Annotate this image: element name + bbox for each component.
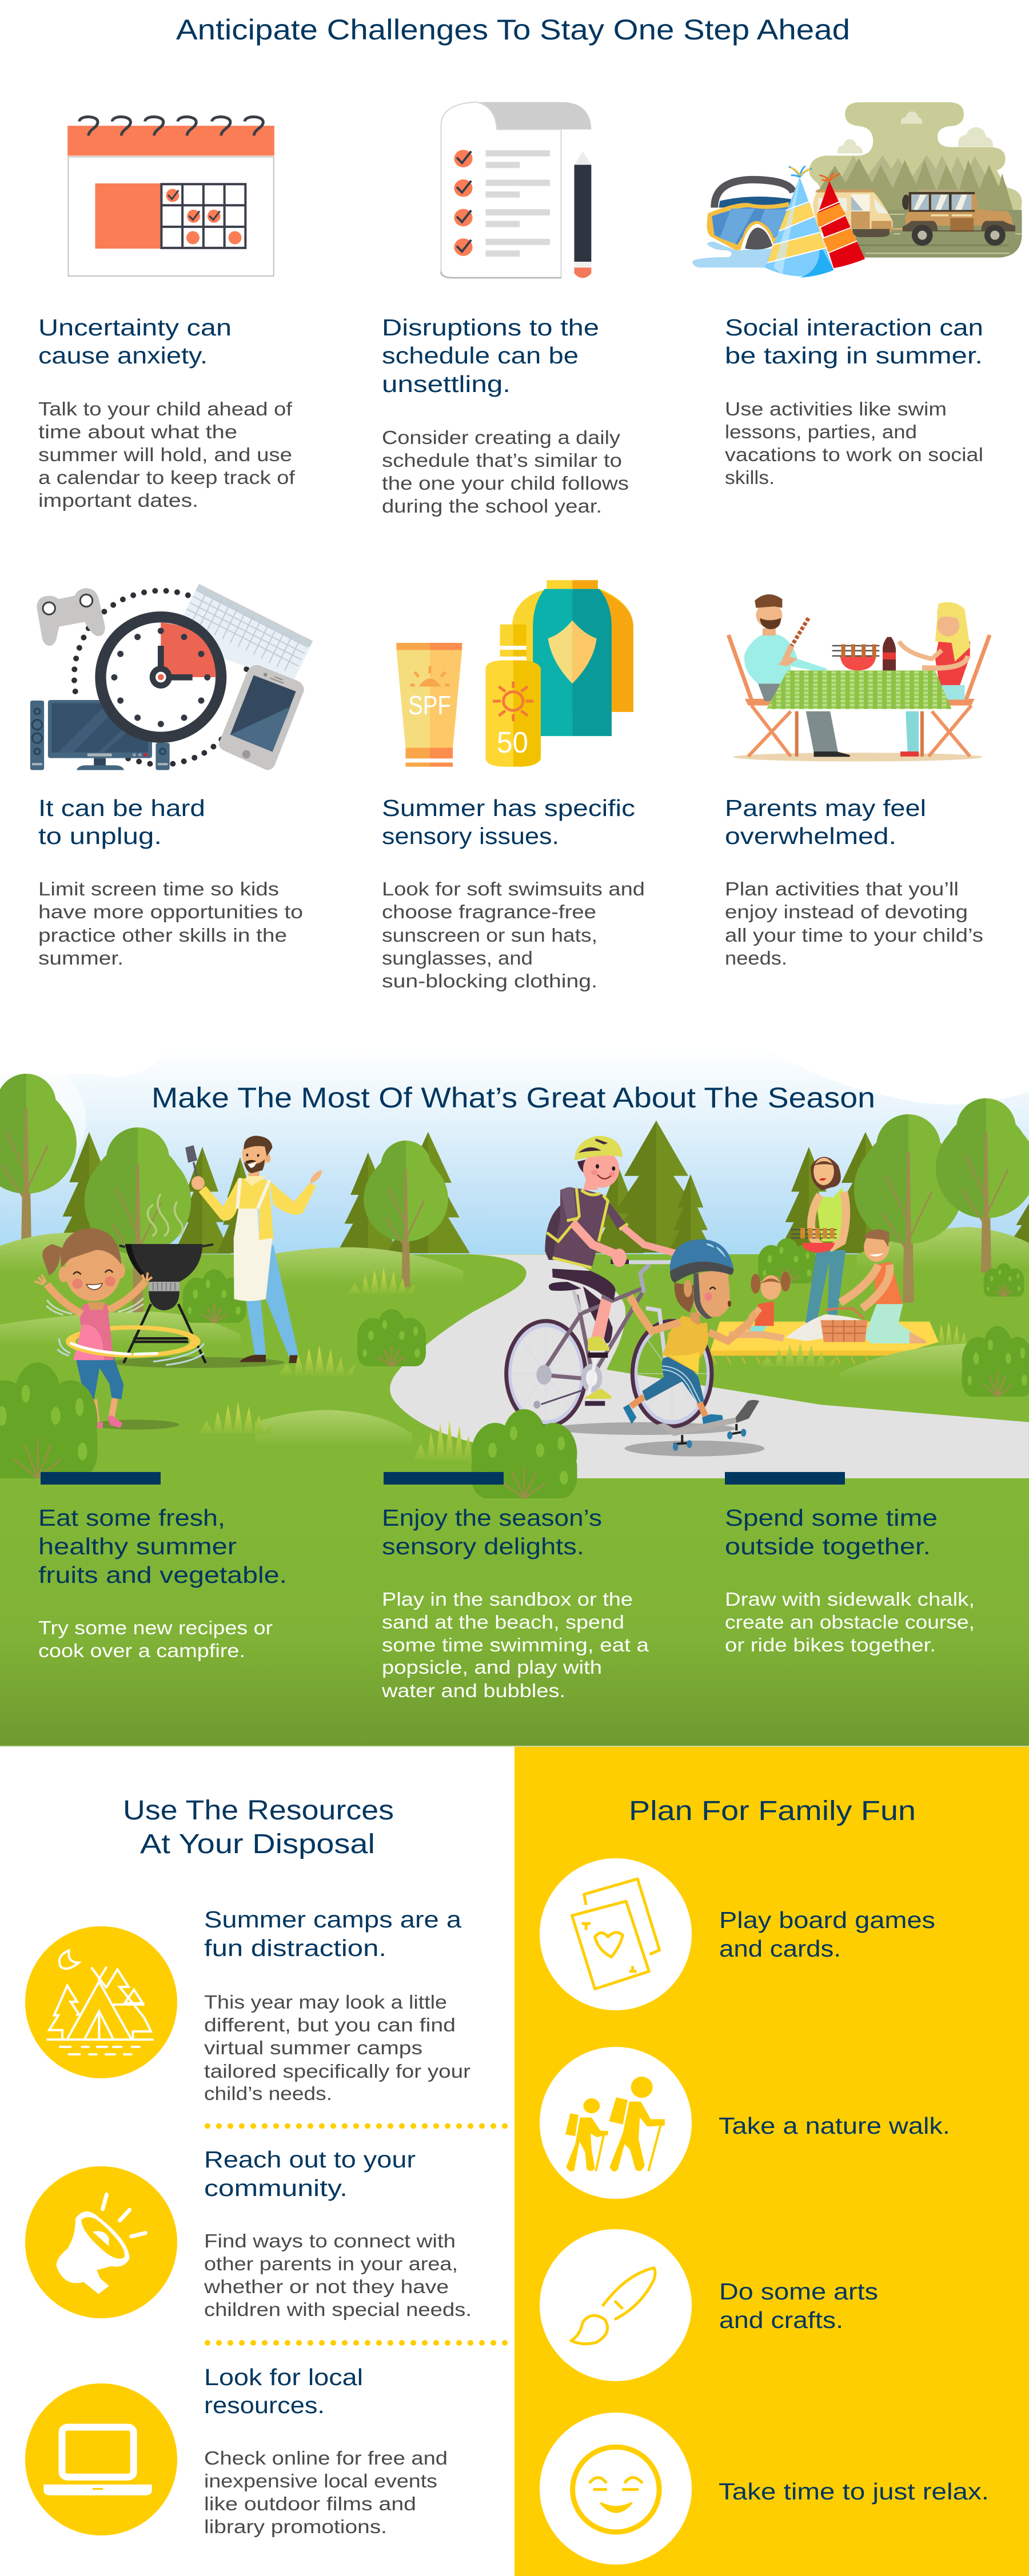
icon: sunscreen and swimsuit: [396, 580, 633, 767]
icon: laptop: [25, 2383, 177, 2535]
ground: [0, 1254, 1029, 1480]
heading: Disruptions to the: [382, 314, 599, 341]
icon: hikers: [540, 2047, 692, 2199]
body text: Talk to your child ahead of: [38, 398, 293, 419]
body text: whether or not they have: [204, 2276, 449, 2297]
body text: during the school year.: [382, 495, 602, 517]
heading: Social interaction can: [725, 314, 983, 341]
panel: parents overwhelmed: [725, 594, 990, 969]
body text: lessons, parties, and: [725, 421, 917, 442]
road: [390, 1254, 1029, 1479]
body text: the one your child follows: [382, 473, 629, 494]
heading: Eat some fresh,: [38, 1505, 225, 1531]
icon: megaphone: [25, 2166, 177, 2318]
body text: choose fragrance-free: [382, 901, 596, 922]
body text: [38, 398, 296, 511]
heading: unsettling.: [382, 371, 510, 397]
body text: time about what the: [38, 421, 237, 442]
item heading: [204, 2364, 363, 2418]
cyclist on bicycle: [506, 1136, 712, 1426]
title: Anticipate Challenges To Stay One Step Ahead: [176, 14, 850, 46]
heading: [382, 314, 599, 397]
body text: all your time to your child’s: [725, 925, 983, 946]
panel: outside together: [725, 1472, 975, 1655]
body text: practice other skills in the: [38, 925, 287, 946]
item heading: Look for local: [204, 2364, 363, 2390]
body text: Check online for free and: [204, 2447, 448, 2469]
icon: clock and screens: [30, 584, 313, 770]
icon: smiling face: [540, 2413, 692, 2565]
item heading: fun distraction.: [204, 1935, 386, 1961]
heading: sensory delights.: [382, 1533, 584, 1559]
body text: summer.: [38, 947, 123, 969]
heading: Uncertainty can: [38, 314, 232, 341]
icon: checklist and pencil: [441, 102, 591, 278]
accent bar: [384, 1472, 504, 1485]
body text: have more opportunities to: [38, 901, 303, 922]
body text: [204, 2447, 448, 2537]
heading: Spend some time: [725, 1505, 938, 1531]
heading: [382, 1505, 602, 1559]
body text: [725, 1589, 975, 1655]
heading: [725, 314, 983, 369]
grass tuft: [760, 1341, 836, 1367]
panel: sensory delights: [381, 1472, 649, 1701]
panel: fresh fruits and vegetables: [38, 1472, 287, 1661]
body text: popsicle, and play with: [382, 1657, 602, 1678]
chef: [185, 1136, 322, 1363]
body text: Play in the sandbox or the: [382, 1589, 633, 1610]
body text: sand at the beach, spend: [382, 1611, 624, 1633]
item heading: Reach out to your: [204, 2146, 416, 2173]
heading: cause anxiety.: [38, 342, 208, 369]
heading: to unplug.: [38, 823, 162, 849]
heading: Parents may feel: [725, 795, 926, 821]
icon: sunscreen and swimsuit: 50: [497, 726, 528, 759]
body text: [382, 878, 645, 991]
body text: Plan activities that you’ll: [725, 878, 959, 899]
body text: like outdoor films and: [204, 2493, 416, 2514]
body text: [204, 1991, 470, 2104]
park scene: [0, 1046, 1029, 1480]
body text: Draw with sidewalk chalk,: [725, 1589, 975, 1610]
item heading: [204, 2146, 416, 2201]
body text: Find ways to connect with: [204, 2230, 456, 2251]
body text: [38, 1617, 273, 1661]
body text: skills.: [725, 467, 775, 488]
item text: Do some arts: [719, 2278, 878, 2305]
panel: resources: [25, 1795, 508, 2537]
item heading: [204, 1906, 461, 1961]
heading: [38, 795, 205, 849]
icon: calendar: [67, 117, 274, 276]
item text: [719, 2278, 878, 2333]
body text: create an obstacle course,: [725, 1611, 975, 1633]
icon: sunscreen and swimsuit: SPF: [408, 690, 451, 720]
body text: [38, 878, 303, 969]
heading: schedule can be: [382, 342, 579, 369]
body text: or ride bikes together.: [725, 1634, 936, 1655]
accent bar: [41, 1472, 161, 1485]
icon: couple at a picnic table: [728, 594, 990, 762]
body text: tailored specifically for your: [204, 2061, 470, 2082]
heading: overwhelmed.: [725, 823, 896, 849]
body text: enjoy instead of devoting: [725, 901, 968, 922]
heading: [38, 314, 232, 369]
heading: [725, 795, 926, 849]
heading: outside together.: [725, 1533, 931, 1559]
body text: sunscreen or sun hats,: [382, 925, 597, 946]
item text: [719, 1907, 935, 1962]
body text: needs.: [725, 947, 787, 969]
body text: [204, 2230, 472, 2320]
item text: Take a nature walk.: [719, 2113, 950, 2139]
heading: Summer has specific: [382, 795, 635, 821]
heading: It can be hard: [38, 795, 205, 821]
body text: children with special needs.: [204, 2299, 472, 2320]
heading: sensory issues.: [382, 823, 559, 849]
heading: [123, 1795, 394, 1859]
body text: sunglasses, and: [382, 947, 533, 969]
body text: [381, 1589, 649, 1701]
item text: Take time to just relax.: [719, 2478, 989, 2505]
heading: At Your Disposal: [140, 1829, 375, 1859]
body text: child’s needs.: [204, 2083, 332, 2104]
item text: Play board games: [719, 1907, 935, 1933]
body text: cook over a campfire.: [38, 1640, 245, 1661]
picnic family: [709, 1157, 1029, 1387]
body text: sun-blocking clothing.: [382, 970, 597, 991]
body text: inexpensive local events: [204, 2470, 437, 2491]
body text: important dates.: [38, 490, 198, 511]
icon: goggles, party hats and road trip: [692, 102, 1022, 278]
body text: summer will hold, and use: [38, 444, 292, 465]
heading: Use The Resources: [123, 1795, 394, 1826]
foreground bush by the path: [414, 1419, 481, 1460]
body text: Limit screen time so kids: [38, 878, 279, 899]
panel: uncertainty: [38, 117, 296, 511]
item heading: community.: [204, 2175, 348, 2201]
body text: Use activities like swim: [725, 398, 947, 419]
heading: healthy summer: [38, 1533, 237, 1559]
item heading: resources.: [204, 2392, 325, 2418]
heading: [38, 1505, 287, 1588]
green information band: [0, 1478, 1029, 1746]
heading: Plan For Family Fun: [629, 1796, 916, 1826]
body text: different, but you can find: [204, 2014, 456, 2035]
item heading: Summer camps are a: [204, 1906, 461, 1933]
heading: fruits and vegetable.: [38, 1562, 287, 1588]
body text: water and bubbles.: [381, 1680, 565, 1701]
body text: [725, 398, 983, 488]
heading: [382, 795, 635, 849]
item text: and crafts.: [719, 2307, 843, 2333]
body text: This year may look a little: [204, 1991, 447, 2013]
girl with hula hoop: [34, 1228, 204, 1430]
body text: vacations to work on social: [725, 444, 983, 465]
foreground bushes and grass: [0, 1326, 1029, 1478]
panel: unplug: [30, 584, 313, 969]
icon: playing cards: [540, 1858, 692, 2010]
heading: be taxing in summer.: [725, 342, 983, 369]
body text: [382, 427, 629, 517]
item text: and cards.: [719, 1935, 841, 1962]
section heading over the scene: Make The Most Of What’s Great About The Season: [151, 1082, 875, 1114]
panel: disruptions: [382, 102, 629, 517]
body text: a calendar to keep track of: [38, 467, 296, 488]
body text: schedule that’s similar to: [382, 450, 622, 471]
icon: camping: [25, 1926, 177, 2078]
body text: Try some new recipes or: [38, 1617, 273, 1638]
body text: other parents in your area,: [204, 2253, 458, 2274]
shadows on the path: [553, 1422, 764, 1457]
panel: sensory issues: [382, 580, 645, 991]
body text: [725, 878, 983, 969]
body text: library promotions.: [204, 2516, 387, 2537]
body text: virtual summer camps: [204, 2037, 422, 2058]
icon: paintbrush: [540, 2229, 692, 2381]
heading: [725, 1505, 938, 1559]
panel: family fun: [514, 1747, 1029, 2576]
bush overlapping band: [471, 1409, 577, 1498]
panel: social interaction: [692, 102, 1022, 488]
accent bar: [725, 1472, 845, 1485]
boy on skateboard: [623, 1239, 759, 1451]
heading: Enjoy the season’s: [382, 1505, 602, 1531]
body text: Look for soft swimsuits and: [382, 878, 645, 899]
body text: some time swimming, eat a: [382, 1634, 649, 1655]
body text: Consider creating a daily: [382, 427, 621, 448]
grill: [109, 1194, 285, 1368]
